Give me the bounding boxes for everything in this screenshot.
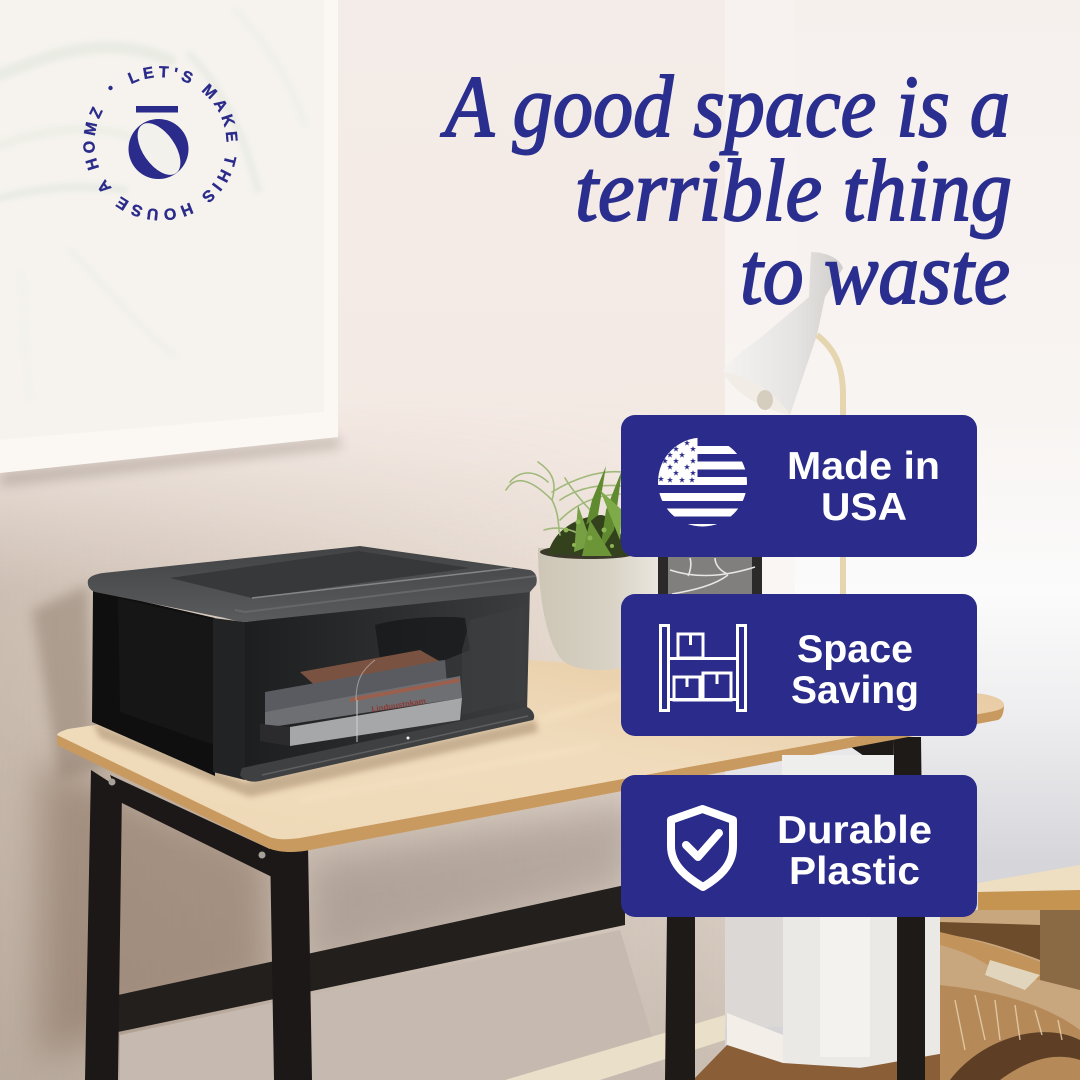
label: Durable [777,809,932,852]
heading [440,59,1012,323]
framed picture behind [658,555,762,595]
curtain and skirting [725,755,943,1067]
label [777,809,932,893]
desk lamp [723,252,843,594]
drawer lid [88,546,537,622]
label: Saving [791,669,919,712]
icon: shelf with boxes [660,626,746,710]
badge: Durable Plastic [621,775,977,917]
front left legs and rail [85,770,312,1080]
drawer side [92,590,215,776]
label [787,445,940,529]
table edge [57,705,1004,852]
label: Plastic [789,850,920,893]
drawer: storage unit [88,546,538,797]
books: Linduustnkam [371,697,426,714]
floor [693,1045,945,1080]
label: Space [797,628,913,671]
rear stretcher [118,885,625,1032]
badge: Made in USA [621,415,977,557]
drawer front [245,585,530,772]
back right leg and crossbar [848,737,925,1080]
icon: shield with check [671,809,733,887]
badge: Space Saving [621,594,977,736]
label [791,628,919,712]
desk [57,660,1004,1080]
wall art frame [0,0,342,486]
heading: A good space is a [440,59,1010,156]
drawer bottom lip [240,707,534,782]
heading: terrible thing [575,143,1012,240]
foreground legs [665,915,925,1080]
icon: US flag circle [658,438,747,526]
potted plant [506,462,658,670]
label: USA [821,486,907,529]
books [260,650,462,746]
brand logo: Let's make this house a Homz: LET'S MAKE THIS HOUSE A HOMZ [83,66,238,220]
drawer post [213,618,245,780]
heading: to waste [740,226,1010,323]
label: Made in [787,445,940,488]
side table and woven basket [940,865,1080,1080]
table surface [57,660,1004,839]
